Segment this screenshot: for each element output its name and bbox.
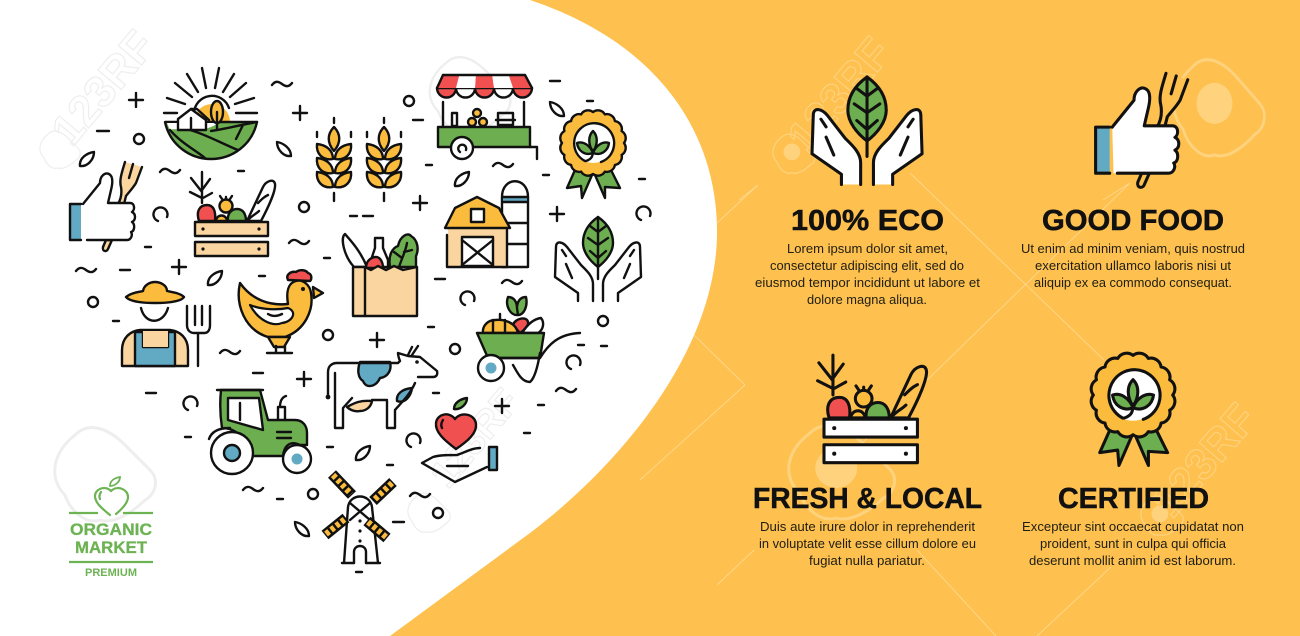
icon: thumbs up with fork [70,162,142,251]
text block: good food description: aliquip ex ea commodo consequat. [1034,276,1232,290]
decorative scatter: small leaves [80,102,564,536]
text block: good food description [1021,242,1245,290]
heading: fresh and local: FRESH & LOCAL [753,483,982,515]
text block: certified description: proident, sunt in culpa qui officia [1040,537,1226,551]
logo: organic market premium: ORGANIC [70,520,152,539]
text block: fresh and local description: in voluptate velit esse cillum dolore eu [759,537,976,551]
icon: barn and silo [445,181,528,267]
icon: wheat right [367,118,401,201]
text block: fresh and local description: fugiat nulla pariatur. [809,554,925,568]
decorative scatter: dashes [97,81,645,572]
watermark overlay: 123RF [423,381,528,496]
decorative scatter: rings [88,96,608,518]
icon: thumbs up with fork, large [1096,73,1188,187]
icon: certified badge, large [1091,353,1175,465]
watermark overlay: 123RF [1143,395,1266,527]
text block: good food description: exercitation ullamco laboris nisi ut [1035,259,1232,273]
panel: certified [1022,353,1244,568]
watermark overlay: 123RF [42,22,165,154]
decorative scatter: open arcs [153,206,650,447]
icon: farmer with pitchfork [122,282,210,366]
icon: produce crate, large [818,355,927,463]
panel: 100% eco [755,77,981,307]
watermark overlay: 123RF [778,29,901,161]
text block: eco description: consectetur adipiscing elit, sed do [770,259,964,273]
heading: 100% eco: 100% ECO [791,205,944,237]
logo: organic market premium: MARKET [75,538,148,557]
icon: tractor [209,390,311,474]
icon: produce crate [190,172,275,256]
icon: hands holding leaf [555,217,641,301]
text block: good food description: Ut enim ad minim veniam, quis nostrud [1021,242,1245,256]
icon: hand holding heart [422,398,497,482]
text block: eco description: eiusmod tempor incididunt ut labore et [755,276,981,290]
icon: windmill [325,474,393,563]
icon: wheelbarrow [477,297,580,382]
heading: certified: CERTIFIED [1058,483,1209,515]
icon: grocery bag [343,234,418,316]
text block: eco description: Lorem ipsum dolor sit amet, [787,242,948,256]
icon: farm and sunrise [164,68,257,159]
logo: organic market premium: PREMIUM [85,567,137,579]
panel: good food [1021,73,1245,290]
panel: fresh and local [753,355,982,568]
icon: cow [326,346,437,428]
text block: certified description: Excepteur sint occaecat cupidatat non [1022,520,1244,534]
icon: wheat left [317,118,351,201]
text block: fresh and local description: Duis aute irure dolor in reprehenderit [760,520,976,534]
decorative scatter: plus signs [129,93,564,413]
logo: organic market premium [69,477,153,579]
text block: eco description: dolore magna aliqua. [807,293,927,307]
text block: eco description [755,242,981,307]
icon: certified badge [560,110,626,198]
heading: good food: GOOD FOOD [1042,205,1224,237]
icon: hands holding leaf, large [812,77,922,184]
white heart half shape [0,0,717,636]
icon: market stall [437,75,537,159]
text block: certified description: deserunt mollit anim id est laborum. [1029,554,1236,568]
decorative scatter: squiggles [76,82,576,497]
text block: certified description [1022,520,1244,568]
icon: hen [239,270,323,353]
text block: fresh and local description [759,520,976,568]
